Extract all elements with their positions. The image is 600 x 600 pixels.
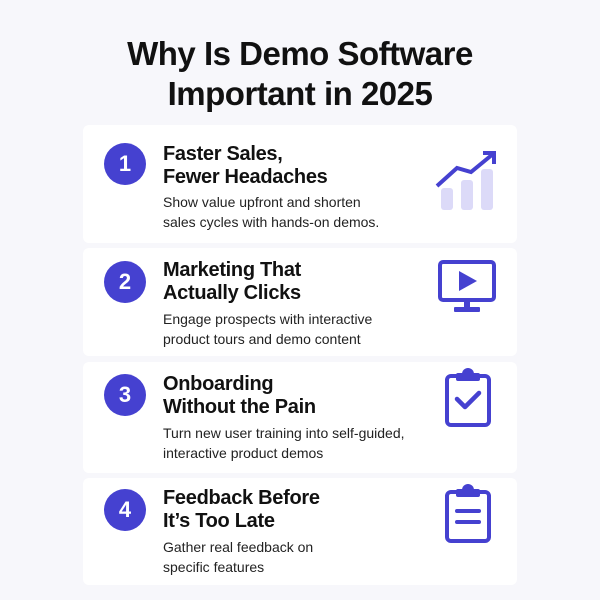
number badge 4: 4 [119, 497, 131, 522]
description 2: Engage prospects with interactive [163, 311, 372, 327]
description 4 [163, 539, 313, 575]
title: Important in 2025 [168, 75, 432, 112]
description 3: interactive product demos [163, 444, 323, 460]
heading 2: Marketing That [163, 259, 301, 281]
heading 1: Fewer Headaches [163, 166, 327, 188]
icon: monitor play [438, 260, 496, 312]
panel: card 3 [83, 362, 517, 473]
heading 4: Feedback Before [163, 487, 320, 509]
description 3: Turn new user training into self-guided, [163, 425, 404, 441]
heading 2 [163, 259, 302, 304]
description 2 [163, 311, 372, 347]
description 4: specific features [163, 558, 264, 574]
description 1: sales cycles with hands-on demos. [163, 214, 379, 230]
description 4: Gather real feedback on [163, 539, 313, 555]
icon: clipboard list [445, 484, 491, 543]
heading 4 [163, 487, 320, 532]
number badge 3: 3 [119, 382, 131, 407]
heading 3: Onboarding [163, 373, 273, 395]
number badge 1: 1 [119, 151, 131, 176]
description 2: product tours and demo content [163, 330, 361, 346]
heading 2: Actually Clicks [163, 282, 301, 304]
description 1 [163, 194, 379, 230]
number badge 2: 2 [119, 269, 131, 294]
heading 1 [163, 143, 327, 188]
title [127, 35, 473, 112]
heading 1: Faster Sales, [163, 143, 283, 165]
description 3 [163, 425, 404, 461]
title: Why Is Demo Software [127, 35, 473, 72]
icon: clipboard check [445, 368, 491, 427]
heading 3 [163, 373, 316, 418]
description 1: Show value upfront and shorten [163, 194, 361, 210]
number badge 2 [104, 261, 146, 303]
number badge 1 [104, 143, 146, 185]
number badge 4 [104, 489, 146, 531]
number badge 3 [104, 374, 146, 416]
heading 3: Without the Pain [163, 396, 316, 418]
panel: card 2 [83, 248, 517, 356]
panel: card 1 [83, 125, 517, 243]
icon: growth chart [436, 151, 496, 210]
panel: card 4 [83, 478, 517, 585]
heading 4: It’s Too Late [163, 510, 275, 532]
